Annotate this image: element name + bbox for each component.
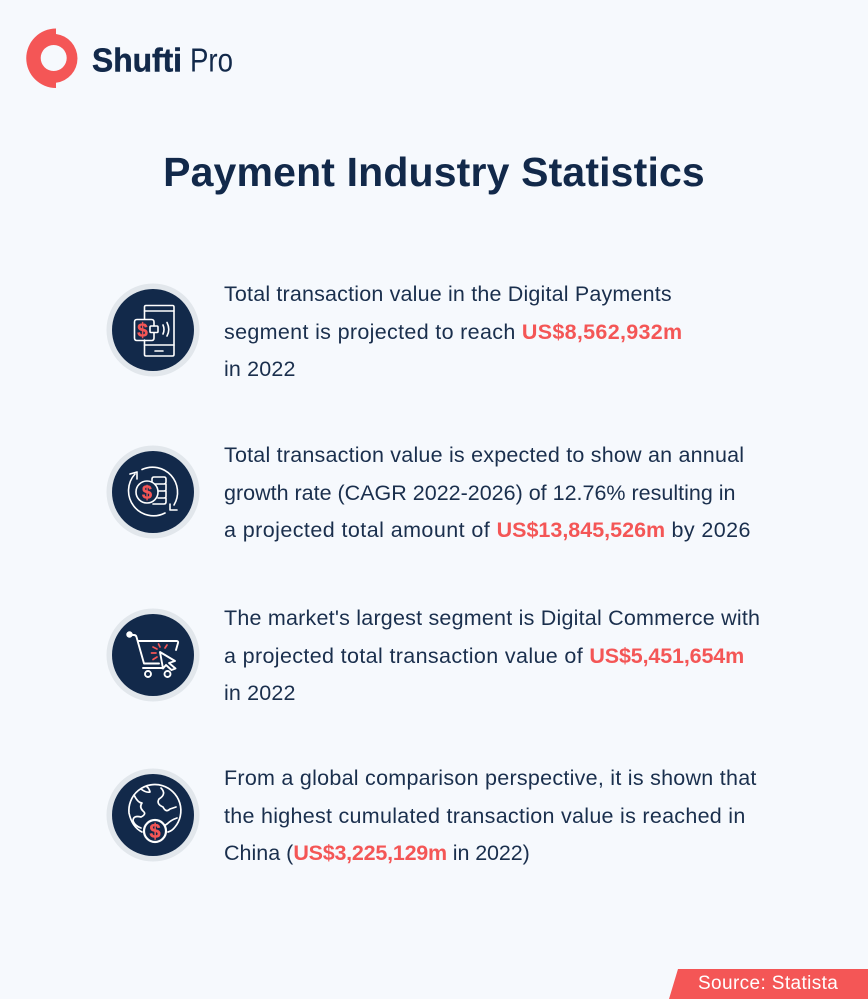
text: digital commerce xyxy=(224,606,760,705)
text: china: China (US$3,225,129m in 2022) xyxy=(224,841,530,865)
icon: shopping cart xyxy=(106,608,200,702)
logo: Shufti Pro xyxy=(26,28,233,88)
text: china: the highest cumulated transaction value is reached in xyxy=(224,804,746,828)
text: digital commerce: The market's largest segment is Digital Commerce with xyxy=(224,606,760,630)
text: annual growth xyxy=(224,443,751,542)
title: Payment Industry Statistics xyxy=(163,149,705,195)
text: annual growth: growth rate (CAGR 2022-2026) of 12.76% resulting in xyxy=(224,480,736,504)
text: annual growth: a projected total amount of US$13,845,526m by 2026 xyxy=(224,518,751,542)
logo: Shufti Pro: Pro xyxy=(190,42,233,78)
source tag xyxy=(669,969,868,999)
text: digital commerce: in 2022 xyxy=(224,681,296,705)
icon: phone wallet: $ xyxy=(137,320,148,342)
text: digital payments xyxy=(224,282,682,381)
text: digital commerce: a projected total transaction value of US$5,451,654m xyxy=(224,644,744,668)
icon: globe with dollar: $ xyxy=(149,821,161,843)
source tag: Source: Statista xyxy=(698,973,838,994)
text: digital payments: in 2022 xyxy=(224,357,296,381)
text: digital payments: segment is projected to reach US$8,562,932m xyxy=(224,320,682,344)
text: annual growth: Total transaction value is expected to show an annual xyxy=(224,443,744,467)
logo: Shufti Pro: Shufti xyxy=(92,42,182,78)
text: china: From a global comparison perspective, it is shown that xyxy=(224,766,757,790)
icon: coin growth cycle xyxy=(106,446,200,538)
icon: phone wallet xyxy=(106,284,200,376)
icon: globe with dollar xyxy=(106,768,200,862)
text: china xyxy=(224,766,757,865)
icon: coin growth cycle: $ xyxy=(142,482,152,502)
text: digital payments: Total transaction value in the Digital Payments xyxy=(224,282,672,306)
